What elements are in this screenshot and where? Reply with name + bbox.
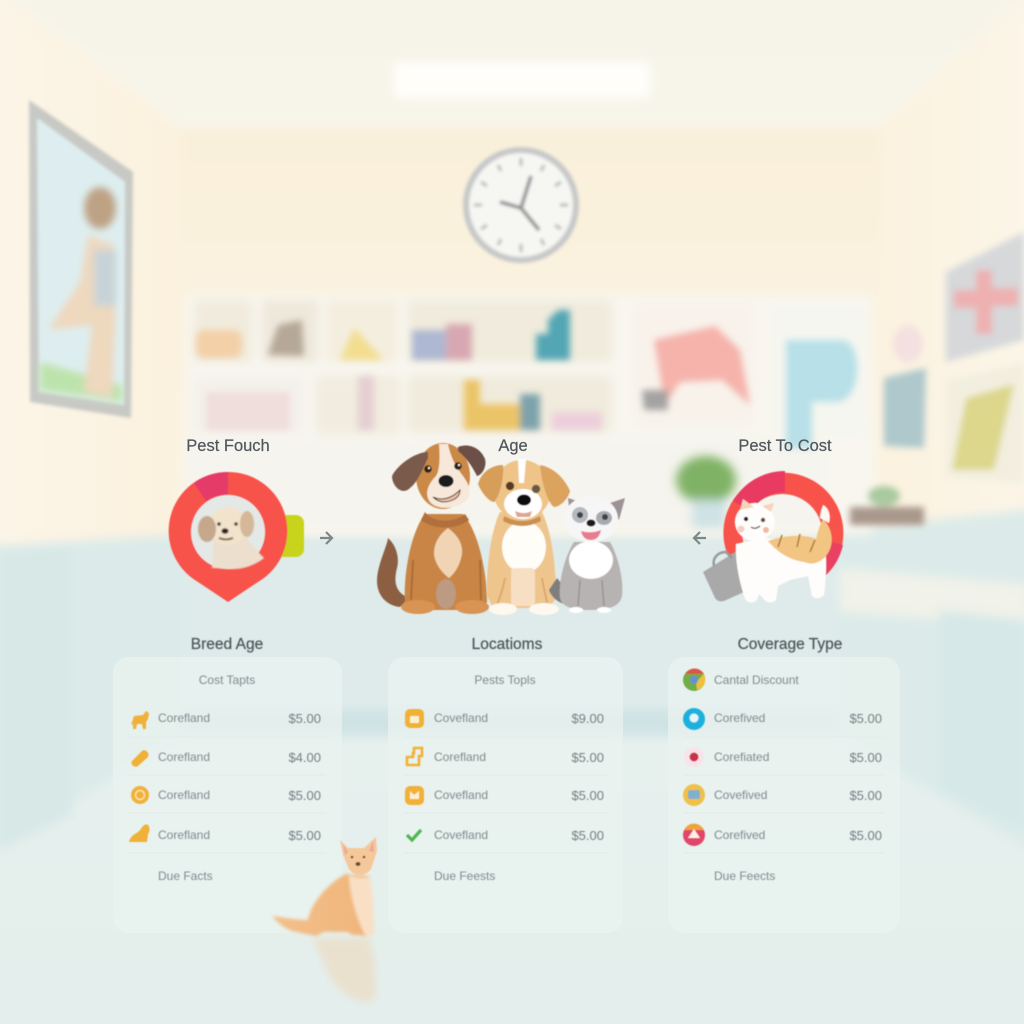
row prices: [571, 711, 604, 843]
panel: Breed Age: [113, 636, 342, 933]
row icons: [129, 711, 150, 842]
arrow: right: [320, 532, 332, 544]
row icons: [683, 669, 705, 846]
row prices: $5.00: [288, 788, 321, 803]
arrow: left: [694, 532, 706, 544]
plant: [676, 456, 736, 528]
row labels: [158, 711, 213, 883]
panel heading: Breed Age: [191, 636, 263, 653]
panel heading: Locatioms: [472, 636, 543, 653]
wall picture left: [29, 100, 133, 418]
panel heading: Coverage Type: [738, 636, 842, 653]
row prices: $5.00: [849, 828, 882, 843]
row icons: [405, 709, 424, 840]
row labels: Corefived: [714, 711, 765, 725]
shelves: [186, 294, 872, 534]
illustration: grey cat-dog: [549, 496, 625, 613]
panel background: [668, 657, 900, 933]
row labels: Due Facts: [158, 869, 213, 883]
ceiling light: [394, 62, 650, 98]
row prices: $5.00: [571, 750, 604, 765]
heading: Pest Fouch: Pest Fouch: [186, 437, 270, 455]
illustration: small orange dog on floor with reflection: [272, 837, 377, 1002]
icon: location ring with puppy photo: [169, 472, 304, 602]
panel: Coverage Type: [668, 636, 900, 933]
panel background: [113, 657, 342, 933]
row prices: $5.00: [849, 788, 882, 803]
panel background: [388, 657, 623, 933]
panel subtitle: Cost Tapts: [199, 673, 255, 687]
row labels: Covefived: [714, 788, 767, 802]
panel subtitle: Pests Topls: [474, 673, 536, 687]
row labels: Due Feects: [714, 869, 775, 883]
panel: Locations: [388, 636, 623, 933]
heading: Age: Age: [498, 437, 528, 455]
row prices: $5.00: [571, 788, 604, 803]
row prices: $5.00: [849, 750, 882, 765]
illustration: tan puppy: [478, 459, 570, 615]
row labels: Cantal Discount: [714, 673, 799, 687]
wall pictures right: [850, 232, 1024, 525]
icon: ring with cat and bag: [703, 471, 843, 603]
row labels: [434, 711, 495, 883]
row labels: Corefland: [158, 750, 210, 764]
row labels: Corefland: [158, 711, 210, 725]
row prices: $9.00: [571, 711, 604, 726]
row labels: [714, 673, 799, 883]
row labels: Covefland: [434, 711, 488, 725]
row prices: $5.00: [571, 828, 604, 843]
heading: Pest To Cost: Pest To Cost: [738, 437, 832, 455]
row labels: Due Feests: [434, 869, 495, 883]
row labels: Covefland: [434, 788, 488, 802]
row prices: $5.00: [288, 828, 321, 843]
row prices: [288, 711, 321, 843]
row prices: $4.00: [288, 750, 321, 765]
row prices: $5.00: [849, 711, 882, 726]
row prices: $5.00: [288, 711, 321, 726]
row labels: Corefived: [714, 828, 765, 842]
row labels: Corefland: [158, 788, 210, 802]
illustration: brown dog: [377, 443, 489, 614]
row labels: Corefiated: [714, 750, 769, 764]
row prices: [849, 711, 882, 843]
shelf items: [196, 310, 857, 448]
wall clock: [463, 147, 579, 263]
row labels: Covefland: [434, 828, 488, 842]
row labels: Corefland: [158, 828, 210, 842]
row labels: Corefland: [434, 750, 486, 764]
